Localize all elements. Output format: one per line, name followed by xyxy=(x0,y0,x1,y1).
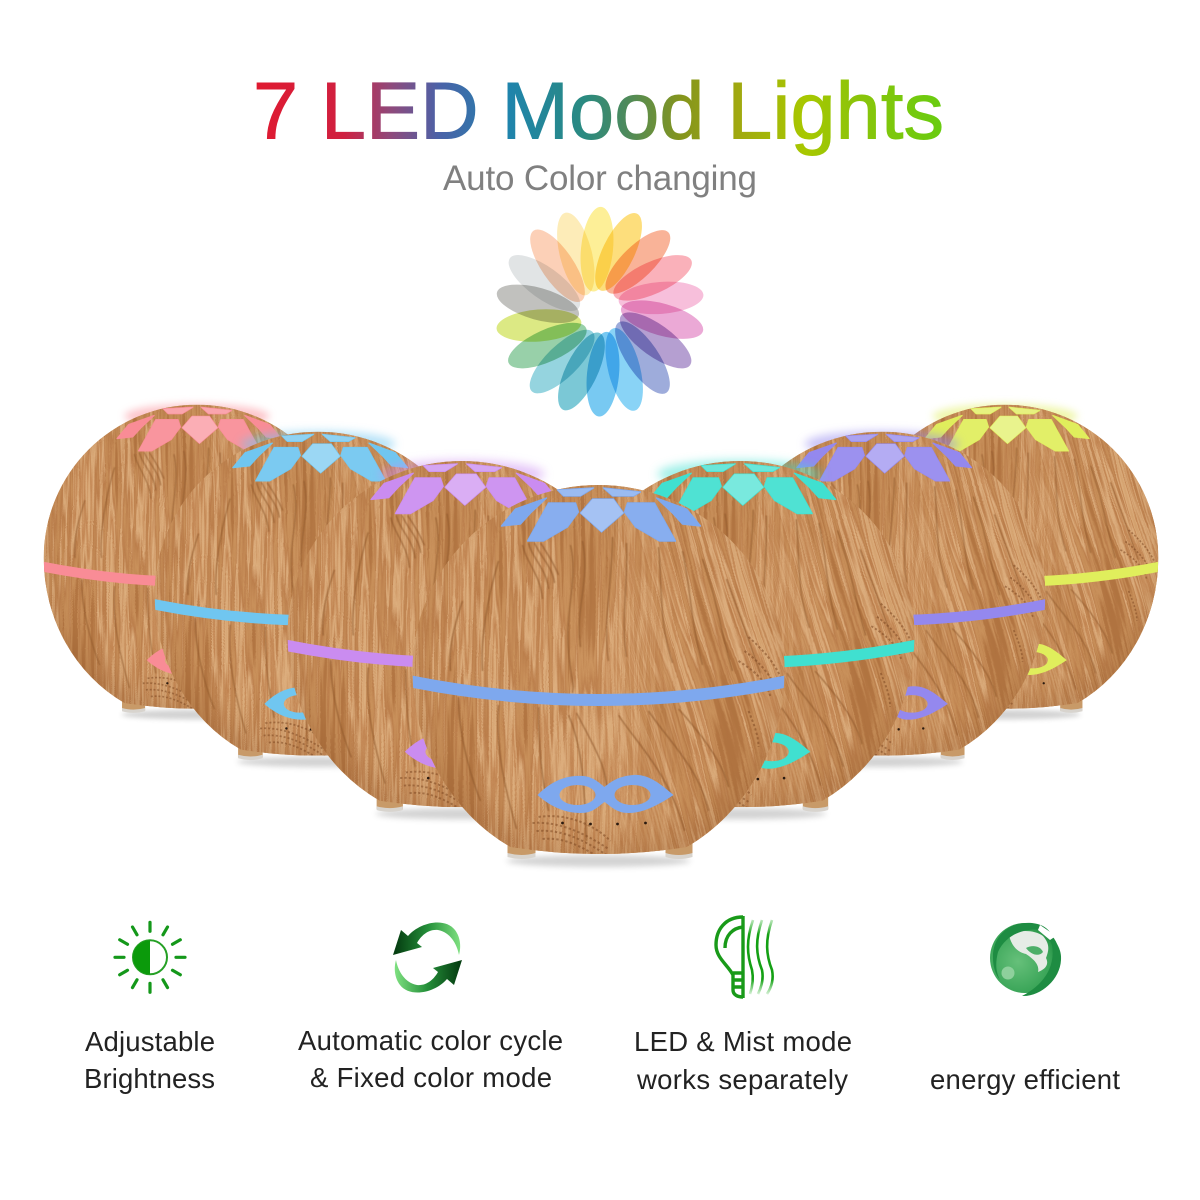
diffuser: blue, left xyxy=(33,310,603,880)
infinity logo light xyxy=(538,775,674,813)
diffuser: pink, far left xyxy=(0,290,465,826)
title: 7 LED Mood Lights xyxy=(253,66,944,156)
icon: half bulb and mist xyxy=(716,916,773,998)
light band xyxy=(408,681,788,700)
icon: colour wheel xyxy=(491,204,709,420)
icon: green globe xyxy=(990,923,1061,996)
diffuser: purple, inner left xyxy=(157,331,767,940)
wood sphere body xyxy=(274,346,923,996)
label: LED and mist: works separately xyxy=(636,1064,848,1095)
label: colour cycle modes: & Fixed color mode xyxy=(310,1062,552,1093)
subtitle: Auto Color changing xyxy=(443,159,757,198)
control holes xyxy=(561,822,647,825)
icon: colour cycle arrows xyxy=(393,922,462,993)
label: adjustable brightness: Adjustable xyxy=(85,1026,215,1057)
diffuser: teal, inner right xyxy=(435,331,1045,940)
icon: brightness sun xyxy=(115,922,185,992)
diffuser: yellow, far right xyxy=(737,290,1200,826)
diffuser: violet, right xyxy=(597,310,1167,880)
lit petal cut-outs xyxy=(502,488,700,541)
label: adjustable brightness xyxy=(84,1026,215,1094)
label: colour cycle modes xyxy=(298,1025,563,1093)
label: colour cycle modes: Automatic color cycle xyxy=(298,1025,563,1056)
label: LED and mist xyxy=(634,1026,852,1095)
diffuser: blue, front centre xyxy=(274,346,923,996)
label: energy efficient: energy efficient xyxy=(930,1064,1120,1095)
label: adjustable brightness: Brightness xyxy=(84,1063,215,1094)
label: LED and mist: LED & Mist mode xyxy=(634,1026,852,1057)
